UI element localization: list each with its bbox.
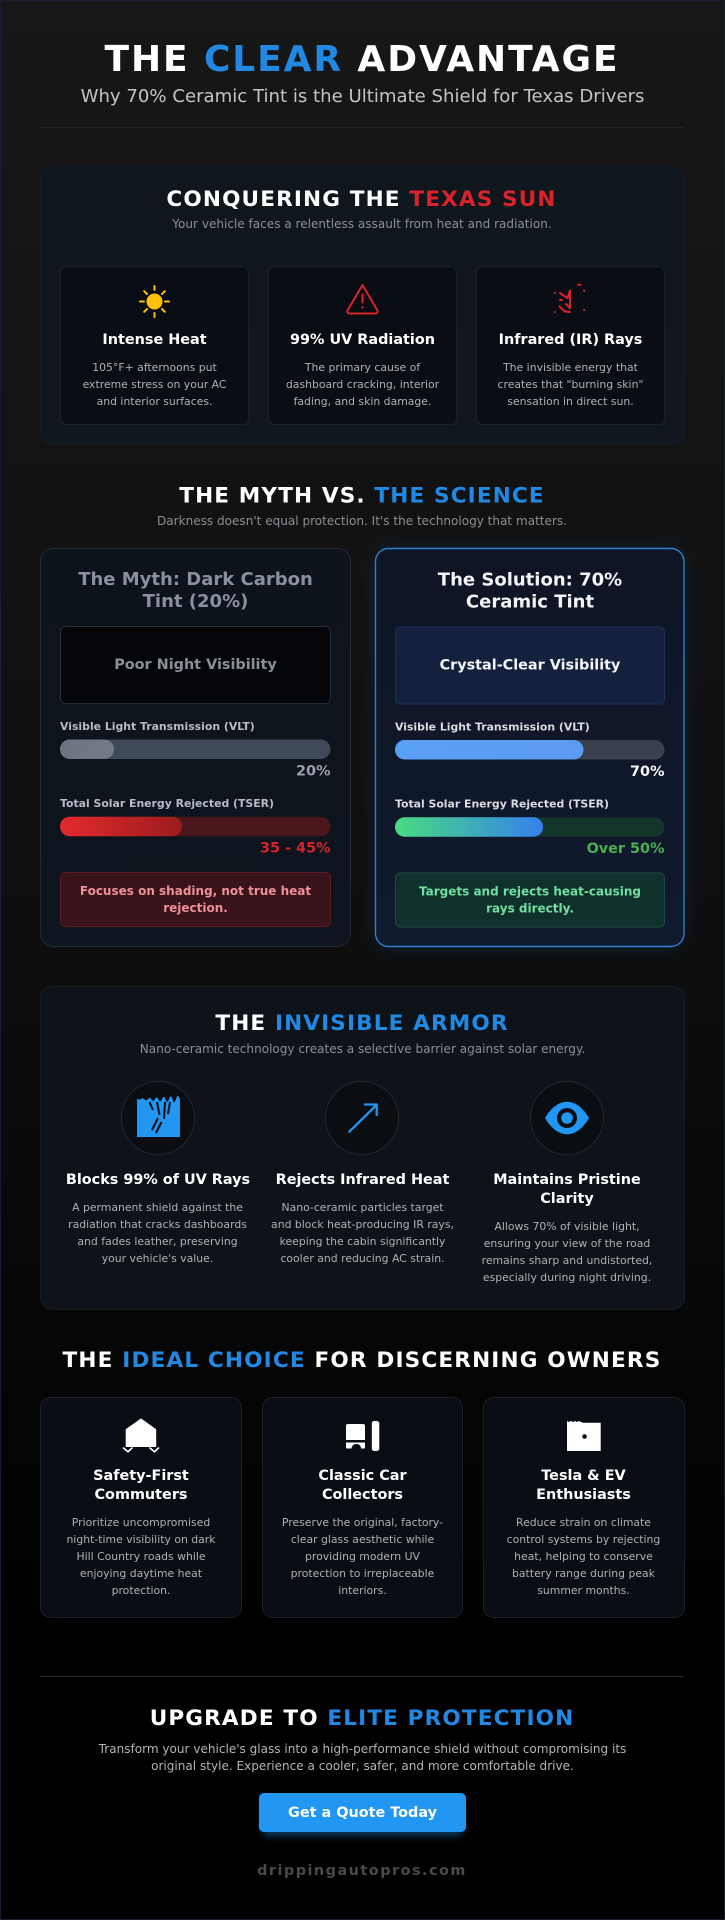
panel title: The Solution: 70%	[438, 570, 622, 590]
feature title: Maintains Pristine	[493, 1172, 641, 1188]
header	[81, 39, 644, 107]
card text: control systems by rejecting	[507, 1533, 660, 1546]
card: infrared rays	[476, 266, 664, 424]
card text: heat, helping to conserve	[514, 1550, 653, 1563]
heading: invisible armor: THE INVISIBLE ARMOR	[215, 1011, 509, 1036]
feature text: your vehicle's value.	[102, 1252, 213, 1265]
note	[60, 872, 330, 926]
feature text: Allows 70% of visible light,	[494, 1220, 640, 1233]
icon: eye	[530, 1082, 604, 1154]
feature text: remains sharp and undistorted,	[482, 1254, 652, 1267]
note: rejection.	[163, 901, 228, 915]
card text: protection to irreplaceable	[291, 1567, 435, 1580]
card text: The invisible energy that	[502, 361, 638, 374]
TSER bar	[60, 797, 330, 856]
visibility box: Poor Night Visibility	[114, 657, 277, 673]
VLT bar	[60, 720, 330, 780]
card title: Safety-First	[93, 1468, 189, 1484]
card text: enjoying daytime heat	[80, 1567, 202, 1580]
icon: house	[124, 1419, 158, 1452]
card title: Tesla & EV	[541, 1468, 627, 1484]
CTA text: Transform your vehicle's glass into a high-performance shield without compromising its	[98, 1742, 626, 1756]
panel title: Tint (20%)	[143, 591, 248, 612]
CTA text: original style. Experience a cooler, safer, and more comfortable drive.	[151, 1759, 574, 1773]
icon: EV battery	[567, 1421, 601, 1451]
feature text: ensuring your view of the road	[484, 1237, 650, 1250]
card title: 99% UV Radiation	[290, 332, 435, 348]
feature title: Clarity	[540, 1191, 594, 1207]
heading: elite protection: UPGRADE TO ELITE PROTECTION	[150, 1706, 574, 1731]
feature title: Rejects Infrared Heat	[276, 1172, 449, 1188]
title: THE CLEAR ADVANTAGE	[105, 39, 619, 80]
section intro: myth vs science: Darkness doesn't equal protection. It's the technology that matters.	[157, 514, 567, 528]
card: intense heat	[60, 266, 248, 424]
button	[259, 1793, 466, 1836]
call to action	[98, 1706, 626, 1879]
VLT bar: Visible Light Transmission (VLT)	[395, 720, 590, 734]
card text: The primary cause of	[304, 361, 421, 374]
feature text: A permanent shield against the	[72, 1201, 243, 1214]
card: Tesla and EV enthusiasts	[484, 1398, 684, 1618]
feature title: Blocks 99% of UV Rays	[66, 1172, 250, 1188]
feature: rejects infrared	[271, 1082, 454, 1265]
VLT bar: 70%	[630, 764, 664, 780]
card text: dashboard cracking, interior	[286, 378, 440, 391]
card text: clear glass aesthetic while	[291, 1533, 435, 1546]
card text: interiors.	[338, 1584, 387, 1597]
feature: pristine clarity	[482, 1082, 652, 1284]
section intro: Nano-ceramic technology creates a selective barrier against solar energy.	[140, 1042, 585, 1056]
card text: Hill Country roads while	[76, 1550, 206, 1563]
section intro: Your vehicle faces a relentless assault from heat and radiation.	[171, 217, 552, 231]
card: classic car collectors	[262, 1398, 462, 1618]
TSER bar: Over 50%	[587, 841, 664, 857]
TSER bar: Total Solar Energy Rejected (TSER)	[60, 797, 274, 810]
heading: myth vs science: THE MYTH VS. THE SCIENCE	[179, 484, 545, 508]
card: UV radiation	[268, 266, 456, 424]
feature text: Nano-ceramic particles target	[281, 1201, 444, 1214]
TSER bar: 35 - 45%	[260, 840, 330, 856]
feature text: cooler and reducing AC strain.	[280, 1252, 445, 1265]
card title: Enthusiasts	[536, 1487, 631, 1503]
card title: Commuters	[95, 1487, 187, 1503]
card: safety-first commuters	[40, 1398, 242, 1618]
feature text: and block heat-producing IR rays,	[271, 1218, 454, 1231]
visibility box: Crystal-Clear Visibility	[440, 658, 621, 674]
card text: extreme stress on your AC	[83, 378, 226, 391]
card text: protection.	[112, 1584, 170, 1597]
card text: 105°F+ afternoons put	[92, 361, 217, 374]
panel: the myth	[40, 548, 350, 946]
feature text: and fades leather, preserving	[77, 1235, 238, 1248]
card title: Collectors	[322, 1487, 403, 1503]
panel: invisible armor	[40, 986, 684, 1310]
heading: ideal choice: THE IDEAL CHOICE FOR DISCERNING OWNERS	[63, 1348, 661, 1373]
card text: sensation in direct sun.	[507, 395, 634, 408]
card text: creates that "burning skin"	[498, 378, 643, 391]
website footer: drippingautopros.com	[257, 1863, 467, 1879]
icon: warning triangle	[347, 285, 378, 314]
note	[396, 873, 664, 927]
card text: Reduce strain on climate	[516, 1516, 651, 1529]
TSER bar	[395, 798, 664, 857]
panel title: Ceramic Tint	[466, 592, 594, 612]
note: Targets and rejects heat-causing	[419, 884, 641, 898]
icon: classic car	[346, 1421, 379, 1451]
card text: Prioritize uncompromised	[72, 1516, 210, 1529]
TSER bar: Total Solar Energy Rejected (TSER)	[395, 798, 609, 810]
feature text: radiation that cracks dashboards	[68, 1218, 247, 1231]
card text: night-time visibility on dark	[66, 1533, 216, 1546]
visibility box	[396, 627, 664, 704]
subtitle: Why 70% Ceramic Tint is the Ultimate Shield for Texas Drivers	[81, 86, 644, 107]
icon: UV shield	[122, 1082, 194, 1154]
card title: Infrared (IR) Rays	[499, 332, 642, 348]
note: rays directly.	[486, 902, 574, 916]
icon: sun	[140, 286, 169, 317]
card text: providing modern UV	[305, 1550, 421, 1563]
VLT bar: 20%	[296, 764, 330, 780]
card text: summer months.	[537, 1584, 630, 1597]
card title: Classic Car	[318, 1468, 407, 1484]
icon: deflect arrow	[326, 1082, 398, 1154]
VLT bar: Visible Light Transmission (VLT)	[60, 720, 255, 733]
VLT bar	[395, 720, 664, 780]
card text: and interior surfaces.	[97, 395, 212, 408]
heading: conquering the Texas sun: CONQUERING THE TEXAS SUN	[166, 187, 557, 212]
panel title: The Myth: Dark Carbon	[78, 569, 313, 590]
card text: battery range during peak	[512, 1567, 656, 1580]
icon: infrared rays	[555, 285, 584, 312]
feature text: keeping the cabin significantly	[280, 1235, 446, 1248]
card text: Preserve the original, factory-	[282, 1516, 443, 1529]
button: Get a Quote Today	[288, 1805, 438, 1821]
visibility box	[60, 626, 330, 704]
card text: fading, and skin damage.	[294, 395, 431, 408]
panel: conquering the Texas sun	[40, 166, 684, 444]
feature: blocks UV	[66, 1082, 250, 1265]
feature text: especially during night driving.	[483, 1271, 651, 1284]
card title: Intense Heat	[102, 332, 207, 348]
panel: the solution	[375, 548, 684, 946]
note: Focuses on shading, not true heat	[80, 884, 311, 898]
